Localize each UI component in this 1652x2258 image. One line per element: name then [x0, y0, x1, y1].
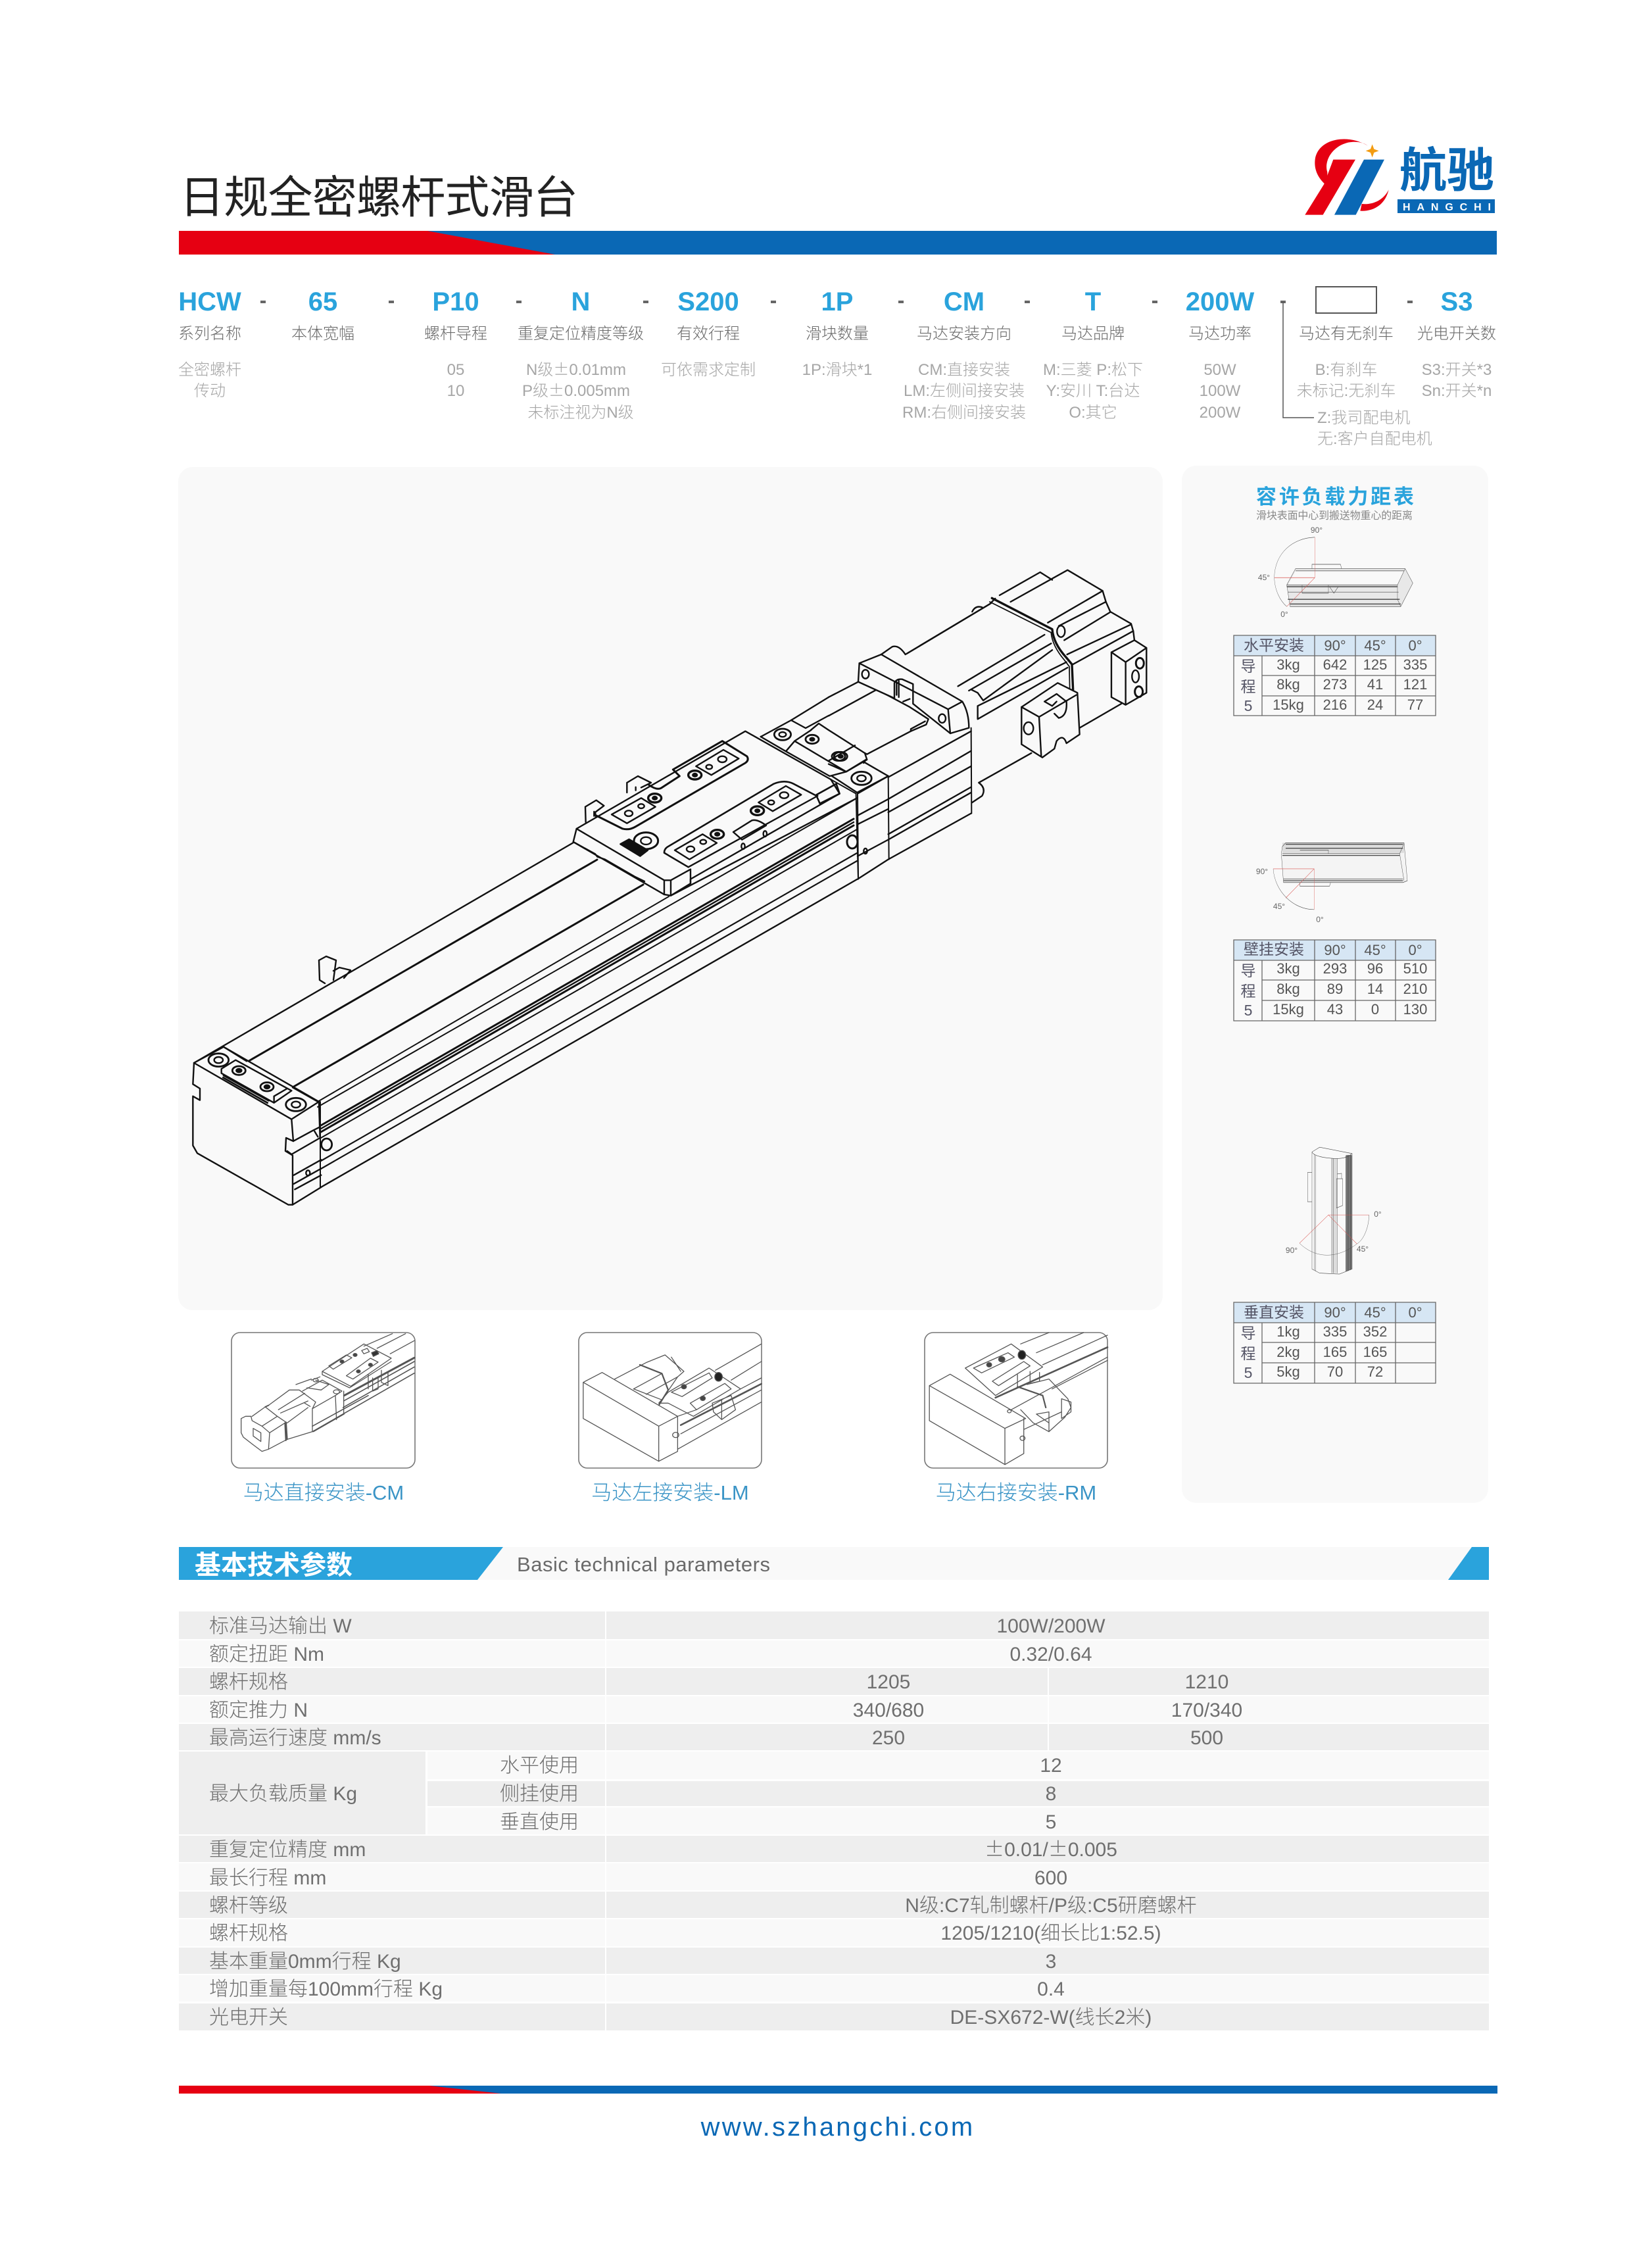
row: screw spec	[179, 1668, 1489, 1695]
model code letters: S3	[1441, 287, 1472, 316]
row: added weight: 增加重量每100mm行程 Kg	[209, 1978, 443, 2000]
table: horizontal mounting: 335	[1403, 656, 1427, 673]
field options: 未标记:无刹车	[1297, 382, 1396, 400]
row: max speed: 500	[1190, 1727, 1223, 1749]
table: wall mounting: 3kg	[1276, 960, 1300, 977]
table: horizontal mounting: 41	[1367, 676, 1383, 693]
row: rated thrust: 170/340	[1171, 1700, 1242, 1721]
diagram: wall mounting: 45°	[1273, 902, 1285, 911]
table: horizontal mounting: 5	[1244, 697, 1252, 714]
row group: max payload: 12	[1040, 1755, 1062, 1777]
table: wall mounting: 5	[1244, 1002, 1252, 1019]
thumbnail: motor left mount	[579, 1333, 762, 1468]
row: rated torque: 0.32/0.64	[1009, 1644, 1092, 1665]
field options: 可依需求定制	[661, 361, 756, 379]
table: vertical mounting: 70	[1327, 1363, 1343, 1380]
table: horizontal mounting: 273	[1323, 676, 1347, 693]
row: repeatability: 重复定位精度 mm	[209, 1839, 366, 1861]
section heading: basic technical parameters: Basic technical parameters	[517, 1553, 770, 1576]
field options: S3:开关*3	[1422, 361, 1492, 379]
table: horizontal mounting: 90°	[1324, 637, 1346, 654]
table: vertical mounting: 90°	[1324, 1304, 1346, 1321]
row: photo switch: DE-SX672-W(线长2米)	[950, 2007, 1152, 2028]
row: rated torque: 额定扭距 Nm	[209, 1644, 324, 1665]
row: screw size: 螺杆规格	[209, 1923, 288, 1944]
field names: 螺杆导程	[424, 325, 487, 343]
field names: 马达有无刹车	[1299, 325, 1394, 343]
field options: 200W	[1200, 404, 1241, 422]
table: wall mounting: 程	[1240, 983, 1256, 1000]
table: wall mounting: 0°	[1408, 942, 1422, 958]
field options: O:其它	[1069, 404, 1117, 422]
row group: max payload: 5	[1046, 1811, 1056, 1833]
table: vertical mounting: 5kg	[1276, 1363, 1300, 1380]
row: max stroke: 最长行程 mm	[209, 1867, 326, 1889]
field options: 未标注视为N级	[527, 404, 634, 422]
table: wall mounting: 0	[1371, 1001, 1379, 1018]
table: wall mounting: 89	[1327, 981, 1343, 997]
table: vertical mounting: 72	[1367, 1363, 1383, 1380]
table: horizontal mounting: 3kg	[1276, 656, 1300, 673]
row: motor output: 100W/200W	[996, 1615, 1105, 1637]
field options: Y:安川 T:台达	[1046, 382, 1140, 400]
row: rated torque	[179, 1640, 1489, 1667]
table: wall mounting: 90°	[1324, 942, 1346, 958]
diagram: horizontal mounting: 0°	[1280, 610, 1288, 619]
row group: max payload: 水平使用	[500, 1755, 579, 1777]
table: wall mounting: 45°	[1364, 942, 1386, 958]
title: 日规全密螺杆式滑台	[180, 173, 578, 223]
row: max stroke	[179, 1863, 1489, 1890]
section heading: basic technical parameters	[179, 1547, 1489, 1580]
table: vertical mounting: 352	[1363, 1323, 1387, 1340]
model code letters: CM	[944, 287, 984, 316]
table: wall mounting: 96	[1367, 960, 1383, 977]
table: vertical mounting: 5	[1244, 1364, 1252, 1381]
field names: 本体宽幅	[291, 325, 354, 343]
field options: 全密螺杆	[178, 361, 241, 379]
field options: RM:右侧间接安装	[902, 404, 1026, 422]
caption: RM: 马达右接安装-RM	[936, 1481, 1096, 1504]
field options: 1P:滑块*1	[802, 361, 872, 379]
panel: allowable load moment table	[1182, 466, 1488, 1503]
field options: 05	[447, 361, 464, 379]
logo: Hangchi: HANGCHI	[1403, 202, 1491, 213]
table: vertical mounting: 0°	[1408, 1304, 1422, 1321]
row: added weight: 0.4	[1037, 1978, 1065, 2000]
table: wall mounting: 壁挂安装	[1244, 941, 1304, 958]
model code letters: 65	[308, 287, 337, 316]
row group: max payload: 最大负载质量 Kg	[209, 1783, 357, 1805]
model code letters	[178, 287, 1472, 316]
table: horizontal mounting: 77	[1407, 697, 1423, 713]
row: screw grade: N级:C7轧制螺杆/P级:C5研磨螺杆	[905, 1895, 1197, 1917]
field names: 马达功率	[1188, 325, 1251, 343]
model code letters: HCW	[178, 287, 241, 316]
field options: P级±0.005mm	[522, 378, 630, 401]
field names: 马达安装方向	[917, 325, 1011, 343]
diagram: wall mounting	[1256, 843, 1407, 924]
field names: 重复定位精度等级	[518, 325, 644, 343]
row: screw size: 1205/1210(细长比1:52.5)	[940, 1923, 1161, 1944]
table: wall mounting: 510	[1403, 960, 1427, 977]
table: vertical mounting: 165	[1363, 1344, 1387, 1360]
table: vertical mounting: 垂直安装	[1244, 1304, 1304, 1321]
row: max speed: 250	[872, 1727, 905, 1749]
empty brake code box	[1316, 287, 1376, 313]
logo: Hangchi: 航驰	[1399, 145, 1494, 197]
row group: max payload: 8	[1046, 1783, 1056, 1805]
row group: max payload: 侧挂使用	[500, 1783, 579, 1805]
diagram: vertical mounting: 0°	[1374, 1210, 1382, 1219]
table: wall mounting: 293	[1323, 960, 1347, 977]
table: technical parameters	[179, 1611, 1489, 2030]
table: wall mounting: 43	[1327, 1001, 1343, 1018]
row: repeatability	[179, 1833, 1489, 1862]
thumbnail: motor direct mount	[231, 1333, 415, 1468]
field options: LM:左侧间接安装	[904, 382, 1025, 400]
table: horizontal mounting: 642	[1323, 656, 1347, 673]
field options	[178, 356, 1492, 448]
slider carriage	[573, 729, 871, 896]
table: wall mounting: 8kg	[1276, 981, 1300, 997]
field names: 马达品牌	[1061, 325, 1125, 343]
table: vertical mounting: 335	[1323, 1323, 1347, 1340]
field names	[178, 325, 1496, 343]
table: vertical mounting: 45°	[1364, 1304, 1386, 1321]
table: horizontal mounting: 0°	[1408, 637, 1422, 654]
row: motor output	[179, 1611, 1489, 1639]
model code letters: 200W	[1186, 287, 1254, 316]
table: wall mounting: 15kg	[1273, 1001, 1304, 1018]
diagram: horizontal mounting: 90°	[1311, 526, 1323, 535]
panel subtitle: 滑块表面中心到搬送物重心的距离	[1256, 510, 1413, 522]
field options: B:有刹车	[1315, 361, 1377, 379]
motor, flange and sensor block	[811, 570, 1146, 879]
field options: 无:客户自配电机	[1317, 430, 1432, 448]
row: screw spec: 螺杆规格	[209, 1671, 288, 1693]
model code letters: P10	[432, 287, 479, 316]
model code letters: T	[1085, 287, 1101, 316]
rear tab	[319, 956, 351, 983]
field options: 10	[447, 382, 464, 400]
near end block	[193, 1047, 332, 1205]
table: vertical mounting: 程	[1240, 1345, 1256, 1362]
table: vertical mounting: 1kg	[1276, 1323, 1300, 1340]
field names: 系列名称	[178, 325, 241, 343]
panel: product drawing	[178, 467, 1163, 1310]
rail body lines	[194, 697, 857, 1187]
section heading: basic technical parameters: 基本技术参数	[195, 1551, 352, 1580]
diagram: vertical mounting	[1286, 1147, 1382, 1274]
row group: max payload	[179, 1752, 1489, 1834]
row: screw size	[179, 1919, 1489, 1946]
footer colour bar	[179, 2086, 1497, 2094]
table: vertical mounting: 2kg	[1276, 1344, 1300, 1360]
row: max speed	[179, 1724, 1489, 1750]
diagram: horizontal mounting: 45°	[1258, 573, 1270, 582]
row: screw grade: 螺杆等级	[209, 1895, 288, 1917]
field names: 有效行程	[677, 325, 740, 343]
diagram: vertical mounting: 90°	[1286, 1246, 1298, 1255]
table: horizontal mounting: 15kg	[1273, 697, 1304, 713]
row: rated thrust	[179, 1696, 1489, 1723]
row: base weight: 3	[1046, 1951, 1056, 1973]
field options: Sn:开关*n	[1422, 382, 1492, 400]
table: horizontal mounting: 24	[1367, 697, 1383, 713]
caption: CM: 马达直接安装-CM	[243, 1481, 404, 1504]
table: vertical mounting: 导	[1240, 1325, 1256, 1342]
field names: 滑块数量	[806, 325, 869, 343]
field options: Z:我司配电机	[1317, 409, 1410, 427]
product line drawing: slide table	[193, 570, 1146, 1205]
table: horizontal mounting	[1234, 635, 1436, 716]
table: horizontal mounting: 8kg	[1276, 676, 1300, 693]
table: wall mounting: 导	[1240, 962, 1256, 979]
row: photo switch: 光电开关	[209, 2007, 288, 2028]
field options: 传动	[194, 382, 226, 400]
field options: 50W	[1203, 361, 1236, 379]
row: rated thrust: 340/680	[853, 1700, 924, 1721]
diagram: horizontal mounting	[1258, 526, 1413, 619]
diagram: vertical mounting: 45°	[1357, 1244, 1369, 1254]
thumbnail: motor right mount	[925, 1333, 1107, 1468]
model code breakdown	[178, 287, 1496, 448]
model code letters: N	[571, 287, 590, 316]
row group: max payload: 垂直使用	[500, 1811, 579, 1833]
table: wall mounting: 210	[1403, 981, 1427, 997]
row: screw spec: 1205	[867, 1671, 910, 1693]
row: screw spec: 1210	[1185, 1671, 1228, 1693]
table: horizontal mounting: 程	[1240, 678, 1256, 695]
row: max stroke: 600	[1034, 1867, 1067, 1889]
row: base weight	[179, 1948, 1489, 1974]
footer website: www.szhangchi.com	[700, 2113, 975, 2142]
caption: LM: 马达左接安装-LM	[591, 1481, 749, 1504]
field options: M:三菱 P:松下	[1043, 361, 1143, 379]
table: horizontal mounting: 45°	[1364, 637, 1386, 654]
panel title: 容许负载力距表	[1256, 485, 1414, 508]
field names: 光电开关数	[1417, 325, 1496, 343]
field options: N级±0.01mm	[526, 356, 626, 380]
field options: 100W	[1200, 382, 1241, 400]
row: screw grade	[179, 1892, 1489, 1918]
row: added weight	[179, 1975, 1489, 2001]
table: horizontal mounting: 121	[1403, 676, 1427, 693]
row: repeatability: ±0.01/±0.005	[984, 1833, 1117, 1862]
table: vertical mounting: 165	[1323, 1344, 1347, 1360]
table: horizontal mounting: 导	[1240, 658, 1256, 675]
row: photo switch	[179, 2003, 1489, 2030]
header colour bar	[179, 231, 1497, 255]
table: wall mounting: 130	[1403, 1001, 1427, 1018]
table: vertical mounting	[1234, 1302, 1436, 1383]
row: motor output: 标准马达输出 W	[209, 1615, 352, 1637]
row: rated thrust: 额定推力 N	[209, 1700, 308, 1721]
table: wall mounting	[1234, 940, 1436, 1021]
row: max speed: 最高运行速度 mm/s	[209, 1727, 381, 1749]
model code letters: S200	[677, 287, 739, 316]
field options: CM:直接安装	[918, 361, 1010, 379]
model code letters: 1P	[821, 287, 853, 316]
diagram: wall mounting: 0°	[1316, 915, 1324, 924]
diagram: wall mounting: 90°	[1256, 867, 1268, 876]
table: horizontal mounting: 水平安装	[1244, 637, 1304, 654]
table: horizontal mounting: 216	[1323, 697, 1347, 713]
row: base weight: 基本重量0mm行程 Kg	[209, 1951, 401, 1973]
brake connector line	[1283, 302, 1314, 418]
logo: Hangchi	[1305, 139, 1495, 215]
table: wall mounting: 14	[1367, 981, 1383, 997]
table: horizontal mounting: 125	[1363, 656, 1387, 673]
